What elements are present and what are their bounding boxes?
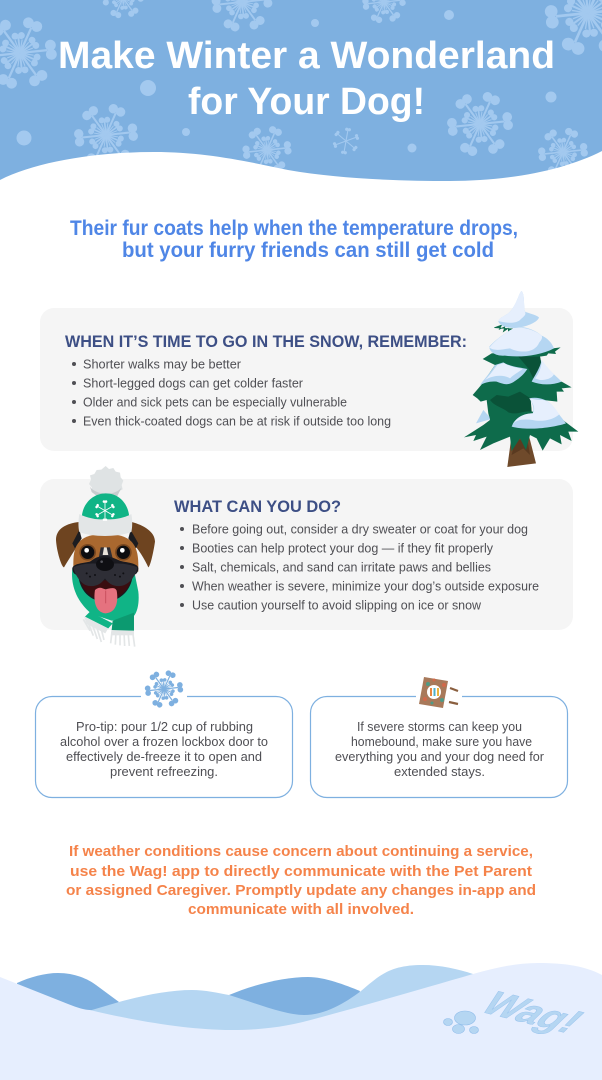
panel: what can you do: [40, 466, 573, 647]
subtitle: but your furry friends can still get cold: [122, 239, 494, 262]
icon: bag of dog treats: [419, 677, 458, 708]
bullet list: Shorter walks may be better: [83, 358, 241, 372]
bullet list: Before going out, consider a dry sweater or coat for your dog: [192, 522, 528, 536]
title: for Your Dog!: [188, 81, 425, 123]
bullet list: Short-legged dogs can get colder faster: [83, 376, 303, 390]
bullet list: [180, 522, 539, 612]
orange call to action text: If weather conditions cause concern about continuing a service,: [69, 843, 533, 860]
hat snowflake: [95, 500, 115, 521]
header banner with snowflakes: [0, 0, 602, 210]
pro-tip text: Pro-tip: pour 1/2 cup of rubbing: [76, 720, 253, 734]
pro-tip text: [60, 720, 268, 779]
orange call to action text: [66, 843, 536, 918]
snow: right middle tier: [532, 360, 562, 384]
pro-tip text: alcohol over a frozen lockbox door to: [60, 735, 268, 749]
bullet list: Booties can help protect your dog — if they fit properly: [192, 542, 494, 556]
snow: left middle tier: [480, 362, 527, 385]
heading: WHAT CAN YOU DO?: [174, 498, 341, 516]
orange call to action text: use the Wag! app to directly communicate with the Pet Parent: [70, 863, 532, 880]
storm text: If severe storms can keep you: [357, 720, 522, 734]
pro-tip text: prevent refreezing.: [110, 765, 218, 779]
storm text: homebound, make sure you have: [351, 735, 532, 749]
storm text: everything you and your dog need for: [335, 750, 544, 764]
storm text: [335, 720, 544, 779]
title: Make Winter a Wonderland: [58, 35, 555, 77]
snow: right lower tier: [512, 398, 566, 429]
orange call to action text: or assigned Caregiver. Promptly update any changes in-app and: [66, 882, 536, 899]
icon: snowflake: [137, 663, 191, 715]
subtitle: [70, 217, 518, 262]
bullet list: Salt, chemicals, and sand can irritate paws and bellies: [192, 560, 491, 574]
snowflake pattern: [0, 0, 602, 186]
title: [58, 35, 555, 123]
storm text: extended stays.: [394, 765, 485, 779]
snow: sprigs and top: [494, 325, 515, 332]
bullet list: Older and sick pets can be especially vulnerable: [83, 396, 347, 410]
pro-tip text: effectively de-freeze it to open and: [66, 750, 262, 764]
icon: boxer dog in hat and scarf: [56, 466, 155, 647]
logo: Wag! with paw print: Wag!: [471, 986, 594, 1040]
white wave: [0, 151, 602, 210]
icon: snowy pine tree: [464, 291, 578, 467]
heading: WHEN IT’S TIME TO GO IN THE SNOW, REMEMBER:: [65, 333, 467, 351]
bullet list: Even thick-coated dogs can be at risk if outside too long: [83, 414, 391, 428]
callout: homebound storms: [310, 677, 568, 798]
panel: when it's time to go in the snow: [40, 291, 578, 467]
subtitle: Their fur coats help when the temperature drops,: [70, 217, 518, 240]
bullet list: When weather is severe, minimize your dog’s outside exposure: [192, 580, 539, 594]
orange call to action text: communicate with all involved.: [188, 901, 414, 918]
bullet list: Use caution yourself to avoid slipping on ice or snow: [192, 598, 482, 612]
footer snow hills: [0, 963, 602, 1080]
bullet list: [72, 358, 391, 428]
callout: pro-tip: [36, 663, 292, 798]
